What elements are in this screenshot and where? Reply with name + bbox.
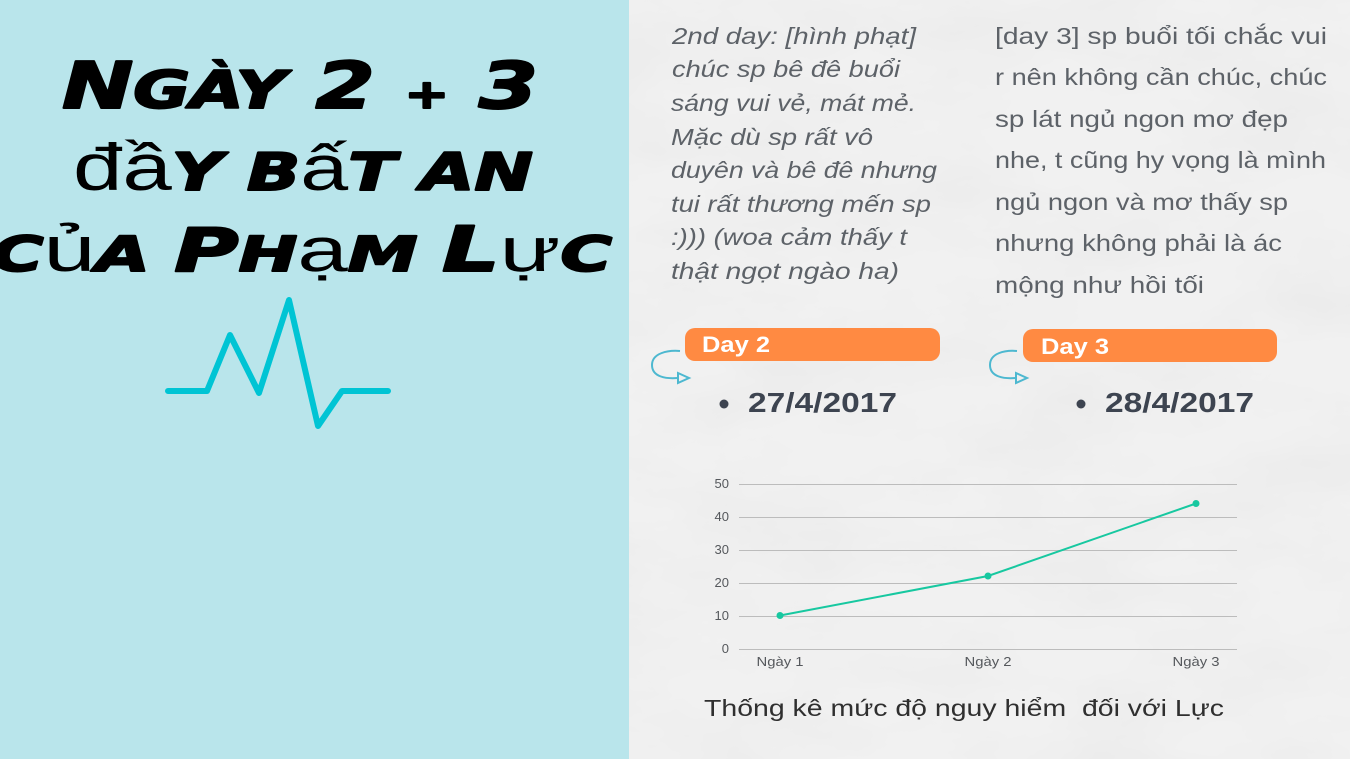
text block: day 2 note: chúc sp bê đê buổi bbox=[672, 56, 901, 82]
text block: day 2 note: Mặc dù sp rất vô bbox=[671, 124, 873, 150]
label: day 3 bbox=[1023, 329, 1277, 362]
y axis labels: 40 bbox=[715, 509, 729, 524]
text block: day 2 note: 2nd day: [hình phạt] bbox=[671, 23, 917, 49]
y axis labels: 0 bbox=[722, 641, 729, 656]
x axis labels: Ngày 1 bbox=[756, 654, 804, 669]
title bbox=[0, 50, 612, 286]
text block: day 3 note bbox=[995, 23, 1327, 298]
y axis labels: 20 bbox=[715, 575, 729, 590]
title line 3: C ủ A P H ạ M L ự C bbox=[0, 213, 612, 286]
text block: day 2 note: sáng vui vẻ, mát mẻ. bbox=[671, 90, 916, 116]
text block: day 2 note: duyên và bê đê nhưng bbox=[671, 157, 937, 183]
text block: day 2 note: :))) (woa cảm thấy t bbox=[671, 224, 909, 250]
data series bbox=[776, 500, 1200, 619]
icon: heartbeat pulse bbox=[168, 300, 388, 426]
text block: day 3 note: sp lát ngủ ngon mơ đẹp bbox=[995, 106, 1288, 132]
panel: left title background bbox=[0, 0, 629, 759]
line chart bbox=[715, 476, 1237, 669]
text block: day 2 note bbox=[671, 23, 937, 284]
label: day 2 bbox=[685, 328, 940, 361]
y axis labels: 30 bbox=[715, 542, 729, 557]
chart caption: Thống kê mức độ nguy hiểm đối với Lực bbox=[704, 695, 1224, 721]
title line 1: N GÀY 2 + 3 bbox=[62, 50, 538, 124]
y axis labels: 50 bbox=[715, 476, 729, 491]
label: day 3: Day 3 bbox=[1041, 334, 1109, 359]
label: day 2: Day 2 bbox=[702, 332, 770, 357]
text block: day 3 note: [day 3] sp buổi tối chắc vui bbox=[995, 23, 1327, 49]
text block: day 3 note: mộng như hồi tối bbox=[995, 272, 1204, 298]
arrow: day 3 curved bbox=[990, 351, 1027, 383]
date: day 3: 28/4/2017 bbox=[1105, 387, 1254, 418]
text block: day 3 note: r nên không cần chúc, chúc bbox=[995, 64, 1327, 90]
x axis labels: Ngày 3 bbox=[1172, 654, 1220, 669]
title line 2: đầ Y B ấT AN bbox=[73, 130, 533, 204]
y axis labels: 10 bbox=[715, 608, 729, 623]
date: day 2: 27/4/2017 bbox=[748, 387, 897, 418]
y axis labels bbox=[715, 476, 729, 656]
panel: right paper background bbox=[629, 0, 1350, 759]
text block: day 3 note: ngủ ngon và mơ thấy sp bbox=[995, 189, 1288, 215]
arrow: day 2 curved bbox=[652, 351, 689, 383]
text block: day 2 note: thật ngọt ngào ha) bbox=[671, 258, 899, 284]
x axis labels bbox=[756, 654, 1220, 669]
text block: day 2 note: tui rất thương mến sp bbox=[671, 191, 931, 217]
text block: day 3 note: nhưng không phải là ác bbox=[995, 230, 1282, 256]
x axis labels: Ngày 2 bbox=[964, 654, 1012, 669]
text block: day 3 note: nhe, t cũng hy vọng là mình bbox=[995, 147, 1326, 173]
